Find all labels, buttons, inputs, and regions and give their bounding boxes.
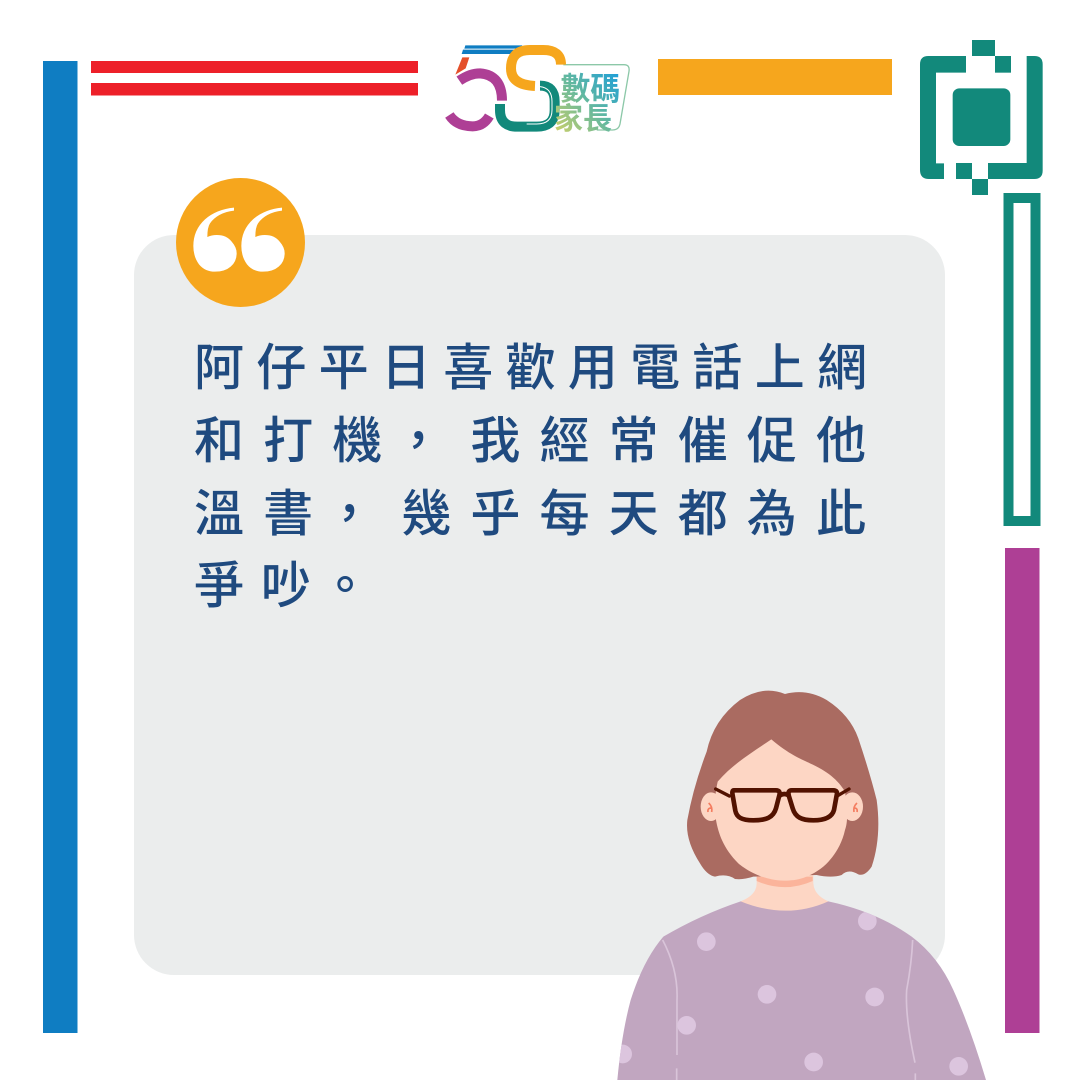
frame: teal outlined bar [1004, 193, 1040, 526]
logo: teal S bottom [500, 86, 555, 127]
frame: purple bar right [1005, 548, 1040, 1033]
logo: text 家長: 家長 [554, 103, 612, 136]
frame: orange bar [658, 59, 892, 95]
logo: red stem of five [455, 57, 469, 75]
panel: quote background [134, 235, 945, 975]
logo: purple five bowl [449, 73, 502, 126]
figure: sweater dots [613, 912, 968, 1076]
logo: outline frame [563, 65, 629, 130]
quote text [194, 340, 867, 614]
figure: sweater seams [663, 940, 915, 1080]
logo: white inline [527, 87, 552, 124]
logo: blue stripes of five [462, 45, 522, 54]
text line 2: 和打機，我經常催促他 [194, 413, 866, 469]
logo: 55 數碼家長 [449, 45, 629, 136]
figure: hair [687, 691, 878, 879]
logo: orange S top [511, 50, 561, 86]
figure: glasses [716, 789, 849, 820]
figure: ears [701, 792, 863, 821]
figure: neck shadow [757, 877, 813, 887]
figure: face [715, 739, 847, 881]
icon: quotation mark badge [176, 178, 305, 307]
icon: teal pixel bracket [920, 40, 1043, 195]
figure: sweater [617, 901, 986, 1080]
frame: blue bar left [43, 61, 78, 1033]
figure: ear details [708, 803, 857, 812]
figure: woman with glasses [613, 691, 986, 1080]
frame: red double lines [91, 61, 418, 96]
figure: neck [741, 867, 828, 911]
text line 4: 爭吵。 [194, 558, 370, 614]
text line 1: 阿仔平日喜歡用電話上網 [194, 340, 867, 396]
icon: quote glyphs [193, 208, 285, 272]
logo: text 數碼: 數碼 [561, 71, 620, 106]
text line 3: 溫書，幾乎每天都為此 [194, 486, 866, 542]
